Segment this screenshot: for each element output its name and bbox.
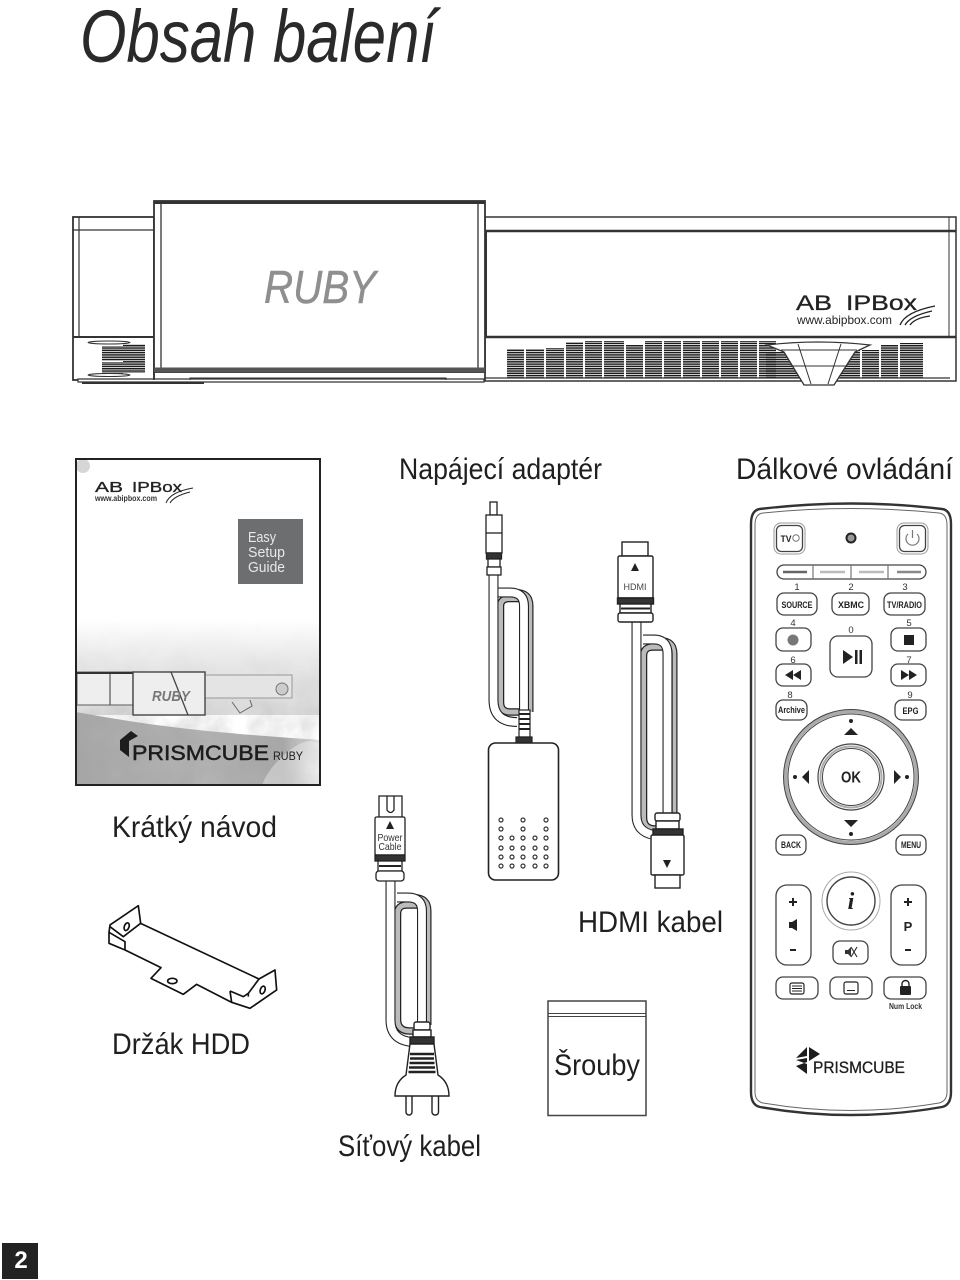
Archive button <box>776 700 807 720</box>
screw bag <box>548 1001 646 1116</box>
colour buttons <box>777 565 926 579</box>
HDD bracket <box>109 906 277 1008</box>
power button <box>897 523 928 554</box>
device logo: IPBox <box>846 291 917 315</box>
page number box <box>2 1243 38 1279</box>
adapter vent holes <box>499 818 548 868</box>
text button <box>776 977 818 999</box>
remote brand logo <box>796 1047 905 1077</box>
number labels: 7 <box>906 655 912 666</box>
number labels: 3 <box>902 582 908 593</box>
label: Dálkové ovládání: Dálkové ovládání <box>736 453 954 486</box>
number labels: 4 <box>790 618 796 629</box>
power cable top connector <box>375 796 405 881</box>
booklet logo: IPBox <box>132 480 183 496</box>
adapter body <box>488 743 558 880</box>
adapter strain relief <box>516 710 532 743</box>
MENU button <box>896 835 926 855</box>
lock button <box>884 977 926 999</box>
power cable connector label: Power <box>378 832 403 844</box>
booklet grey box: Easy Setup Guide: Guide <box>248 559 285 576</box>
device left section <box>73 217 484 383</box>
subtitle button <box>830 977 872 999</box>
booklet brand: PRISMCUBE RUBY: PRISMCUBE <box>132 742 269 765</box>
BACK button <box>776 835 806 855</box>
record button <box>776 628 811 651</box>
number labels <box>787 582 913 701</box>
device logo: AB <box>796 291 832 315</box>
page number box: 2 <box>14 1247 28 1274</box>
adapter DC plug <box>486 502 502 575</box>
info button <box>822 872 880 930</box>
booklet grey box: Easy Setup Guide <box>238 519 303 584</box>
power cable <box>375 796 449 1115</box>
remote brand logo: PRISMCUBE <box>813 1059 905 1077</box>
label: Síťový kabel: Síťový kabel <box>338 1130 481 1163</box>
booklet grey box: Easy Setup Guide: Setup <box>248 544 285 561</box>
HDMI cable loop <box>636 620 674 835</box>
SOURCE button: SOURCE <box>782 600 812 610</box>
label: Držák HDD: Držák HDD <box>112 1028 250 1061</box>
play pause button <box>830 636 872 677</box>
power adapter <box>486 502 558 880</box>
power cable connector label <box>378 832 403 853</box>
booklet device picture: RUBY <box>152 688 192 705</box>
device logo: www.abipbox.com <box>796 313 892 327</box>
device vents <box>507 341 923 378</box>
TV power button: TV <box>780 534 792 545</box>
booklet logo: www.abipbox.com <box>94 493 157 503</box>
label: HDMI kabel: HDMI kabel <box>578 906 723 939</box>
TV/RADIO button: TV/RADIO <box>887 600 922 610</box>
number labels: 8 <box>787 690 793 701</box>
number labels: 0 <box>848 625 854 636</box>
device: front view of receiver <box>73 201 956 385</box>
volume rocker <box>776 885 811 965</box>
booklet brand: PRISMCUBE RUBY: RUBY <box>273 751 303 763</box>
label: Krátký návod: Krátký návod <box>112 811 277 844</box>
device right section <box>485 217 956 381</box>
booklet grey box: Easy Setup Guide: Easy <box>248 529 276 546</box>
booklet logo <box>94 480 193 503</box>
number labels: 9 <box>907 690 913 701</box>
display: RUBY: RUBY <box>264 261 379 313</box>
number labels: 5 <box>906 618 912 629</box>
LED indicator <box>846 534 856 542</box>
device logo <box>796 291 935 327</box>
label: Napájecí adaptér: Napájecí adaptér <box>399 453 602 486</box>
booklet device picture <box>77 672 292 715</box>
device stand <box>767 342 870 385</box>
number labels: 2 <box>848 582 854 593</box>
label: Šrouby: Šrouby <box>554 1048 640 1082</box>
booklet logo: AB <box>95 480 123 496</box>
remote control <box>751 504 951 1115</box>
HDMI top connector <box>618 542 654 622</box>
panel: setup guide booklet <box>75 458 321 786</box>
remote body <box>751 504 951 1115</box>
Archive button: Archive <box>778 705 805 715</box>
HDMI bottom connector <box>651 813 684 888</box>
Num Lock label: Num Lock <box>889 1001 922 1011</box>
channel rocker <box>891 885 926 965</box>
HDMI cable <box>618 542 684 888</box>
stop button <box>891 628 926 651</box>
power cable connector label: Cable <box>378 841 402 853</box>
booklet brand: PRISMCUBE RUBY <box>120 731 303 765</box>
channel rocker: P <box>904 919 913 934</box>
number labels: 1 <box>794 582 800 593</box>
navigation ring <box>784 710 918 844</box>
SOURCE button <box>777 593 817 615</box>
power cable mains plug <box>395 1022 449 1115</box>
XBMC button <box>832 593 869 615</box>
EPG button: EPG <box>902 706 918 716</box>
XBMC button: XBMC <box>838 600 864 611</box>
info button: i <box>848 889 855 915</box>
OK label: OK <box>841 770 862 786</box>
TV power button <box>774 523 805 554</box>
booklet cloud texture <box>76 459 320 785</box>
number labels: 6 <box>790 655 796 666</box>
MENU button: MENU <box>901 840 921 850</box>
mute button <box>833 941 868 964</box>
adapter cable loop <box>494 570 530 722</box>
fast forward button <box>891 664 926 686</box>
power cable loop <box>390 878 428 1042</box>
EPG button <box>895 700 926 720</box>
HDMI connector label: HDMI <box>624 582 646 592</box>
BACK button: BACK <box>781 840 801 850</box>
rewind button <box>776 664 811 686</box>
device centre panel <box>154 201 485 380</box>
TV/RADIO button <box>884 593 925 615</box>
